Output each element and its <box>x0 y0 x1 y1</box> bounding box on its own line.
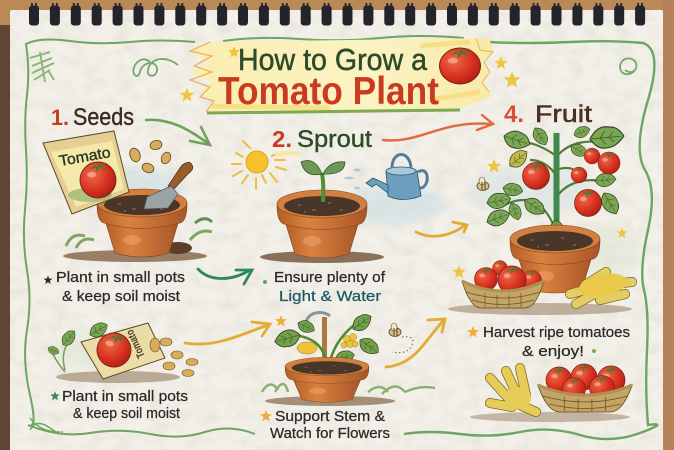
illustration: seed packet and pot <box>43 131 212 262</box>
tomatoes in basket <box>474 260 542 294</box>
step 3 caption: Watch for Flowers <box>270 426 390 442</box>
arrow: step 1 caption to step 2 caption <box>198 269 252 284</box>
step 1b caption <box>50 389 188 422</box>
illustration: fruiting tomato plant <box>477 124 625 293</box>
terracotta pot <box>510 225 600 293</box>
illustration: second glove and basket <box>470 363 632 422</box>
step 1 caption: & keep soil moist <box>62 289 180 305</box>
yellow flowers <box>297 334 358 354</box>
basket <box>462 281 544 308</box>
tomatoes on vine <box>522 147 620 216</box>
step 2 caption <box>263 270 386 305</box>
step 2 heading: Sprout <box>297 126 372 153</box>
spiral binding rings <box>30 3 645 25</box>
tomatoes in basket <box>546 363 625 400</box>
packet <box>81 323 165 379</box>
arrow: packet to plant <box>185 322 270 344</box>
step 1 heading: 1. <box>51 105 69 130</box>
stems and leaves <box>273 311 382 368</box>
decorative scribbles and swirls <box>30 52 636 82</box>
arrow: sprout pot to fruit pot <box>416 222 467 236</box>
step 4 heading: 4. <box>504 101 524 128</box>
icon: sun <box>232 141 300 189</box>
seedling leaves <box>46 319 110 372</box>
water drops <box>344 168 361 190</box>
gloves <box>570 270 632 304</box>
illustration: sprout in pot <box>260 160 384 263</box>
icon: watering can <box>366 154 427 200</box>
stake and stems <box>505 133 610 240</box>
illustration: harvest basket with gloves <box>448 260 632 315</box>
terracotta pot <box>97 189 187 257</box>
step 4 heading <box>504 101 592 128</box>
decorative stars <box>180 46 627 278</box>
watercolor washes <box>45 165 640 366</box>
title banner <box>190 38 494 113</box>
packet: Tomato <box>124 327 148 360</box>
step 1 heading: Seeds <box>73 104 134 131</box>
grass <box>262 384 435 394</box>
harvest caption: & enjoy! <box>522 344 584 360</box>
terracotta pot <box>285 357 369 402</box>
step 1b caption: & keep soil moist <box>73 406 180 422</box>
step 3 caption <box>260 409 390 442</box>
illustration: second seed packet <box>46 319 198 383</box>
step 2 caption: Ensure plenty of <box>274 270 386 286</box>
basket <box>538 385 632 412</box>
step 1 caption: Plant in small pots <box>56 270 185 286</box>
ground <box>448 303 632 315</box>
step 1 caption <box>44 270 185 305</box>
ground <box>265 396 395 406</box>
harvest caption: Harvest ripe tomatoes <box>483 325 630 341</box>
icon: title tomato <box>440 46 480 84</box>
step 1b caption: Plant in small pots <box>62 389 188 405</box>
seedling <box>301 160 345 202</box>
arrow: flowering plant to harvest <box>386 319 445 367</box>
yellow glove <box>490 368 536 412</box>
step 3 caption: Support Stem & <box>275 409 385 425</box>
seed packet: Tomato <box>58 144 112 170</box>
step 2 caption: Light & Water <box>279 289 381 305</box>
bee <box>477 177 489 190</box>
terracotta pot <box>277 190 367 258</box>
step 2 heading: 2. <box>272 126 292 152</box>
trowel <box>144 162 193 209</box>
illustration: flowering plant in pot <box>262 311 435 406</box>
heading: how to grow a: How to Grow a <box>238 42 428 77</box>
spilled seeds <box>150 338 198 376</box>
seed packet <box>43 131 129 214</box>
stake <box>306 313 330 367</box>
leaves <box>484 124 625 243</box>
star: plant accent <box>275 315 287 326</box>
harvest caption <box>467 325 630 360</box>
soil mound <box>260 251 384 263</box>
heading: tomato plant: Tomato Plant <box>218 70 439 113</box>
soil mound <box>63 219 212 262</box>
ground <box>470 412 630 422</box>
arrow: seeds to sprout <box>146 120 210 145</box>
step 1 heading <box>51 104 134 131</box>
arrow: sprout to fruit <box>383 115 493 140</box>
falling seeds <box>128 139 173 174</box>
icon: bee <box>389 323 413 353</box>
step 4 heading: Fruit <box>535 101 592 128</box>
ground <box>56 371 180 383</box>
